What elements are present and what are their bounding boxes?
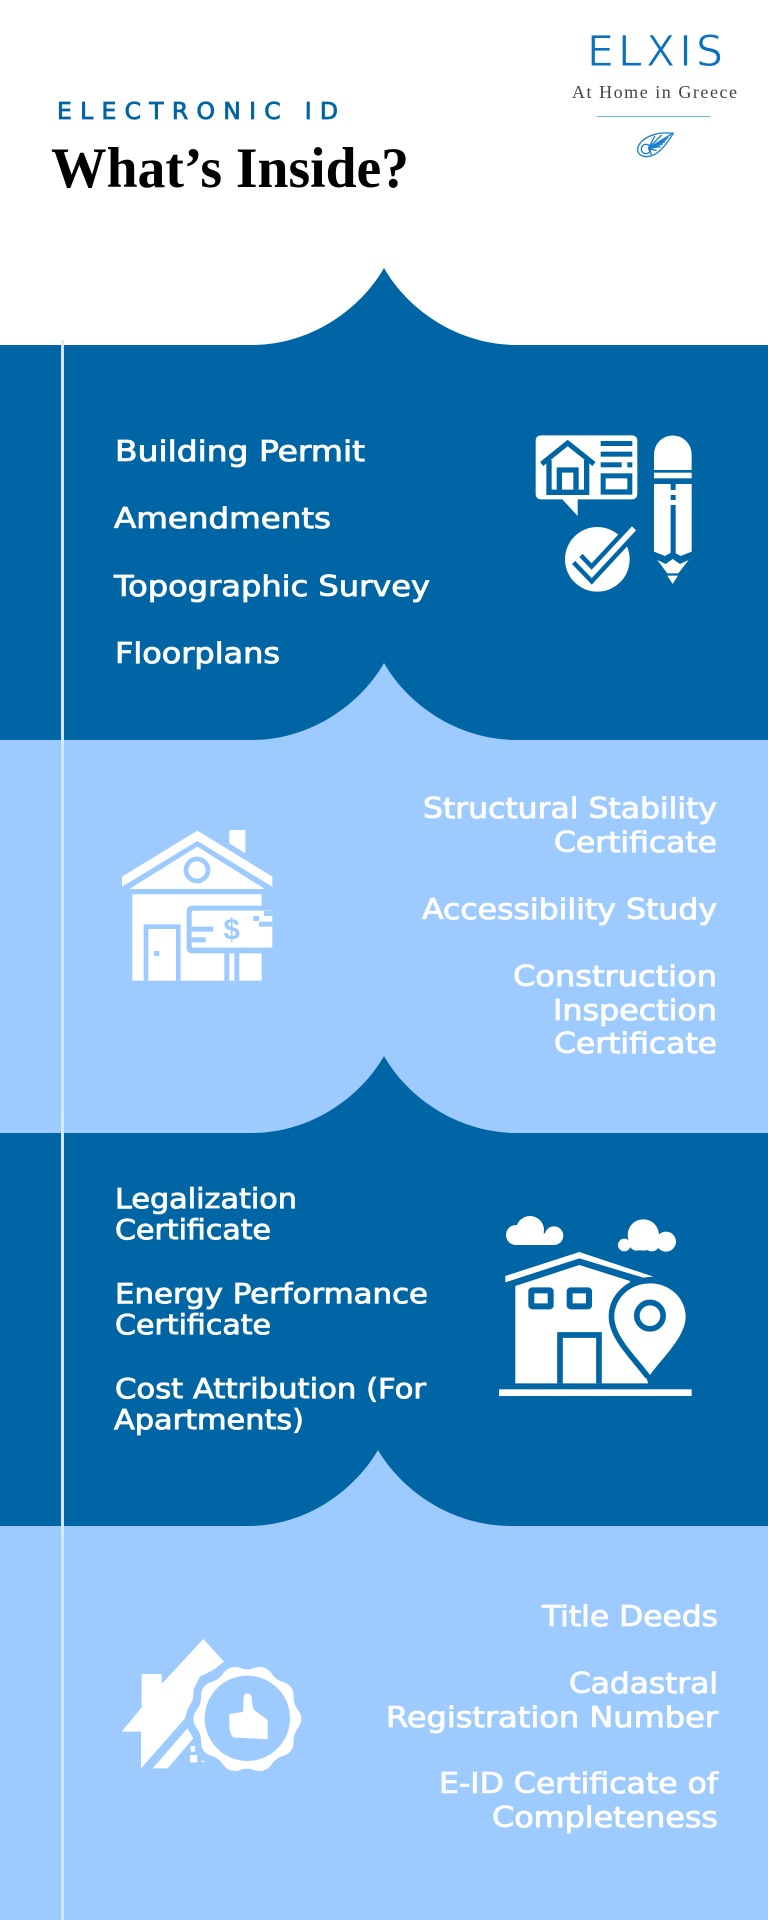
heading block (51, 97, 409, 200)
icon: house with price sign: $ (223, 913, 240, 946)
list: documents group 4: Title Deeds (541, 1600, 718, 1633)
list: documents group 2 (422, 792, 717, 1060)
panel: title deeds and completeness (0, 1450, 768, 1920)
list: documents group 2: Structural Stability (423, 792, 717, 825)
list: documents group 4 (386, 1600, 719, 1834)
list: documents group 3 (114, 1183, 428, 1436)
list: documents group 2: Construction (513, 960, 717, 993)
list: documents group 3: Energy Performance (115, 1278, 428, 1310)
list: documents group 1: Floorplans (115, 637, 280, 670)
icon: shell (638, 133, 673, 157)
list: documents group 1: Amendments (114, 502, 331, 535)
list: documents group 2: Certificate (554, 826, 717, 859)
logo wordmark: ELXIS (587, 28, 723, 77)
list: documents group 4: Registration Number (386, 1701, 718, 1734)
list: documents group 3: Apartments) (114, 1404, 304, 1436)
logo: Elxis (572, 28, 737, 157)
list: documents group 2: Certificate (554, 1027, 717, 1060)
panel: building permit documents (0, 268, 768, 740)
list: documents group 2: Accessibility Study (422, 893, 717, 926)
list: documents group 4: E-ID Certificate of (439, 1767, 719, 1800)
icon: house with price sign (122, 830, 272, 981)
title: What’s Inside? (51, 137, 409, 200)
icon: house plan, check mark and pencil (536, 435, 692, 592)
icon: house with thumbs-up badge (122, 1639, 301, 1771)
panel: structural certificates (0, 663, 768, 1133)
icon: house with location pin and clouds (499, 1216, 692, 1396)
list: documents group 1: Topographic Survey (113, 570, 430, 603)
panel: legalization and energy certificates (0, 1056, 768, 1526)
list: documents group 3: Certificate (115, 1214, 271, 1246)
list: documents group 1: Building Permit (115, 435, 365, 468)
list: documents group 3: Certificate (115, 1309, 271, 1341)
list: documents group 3: Legalization (115, 1183, 297, 1215)
list: documents group 4: Completeness (492, 1801, 718, 1834)
logo tagline: At Home in Greece (572, 82, 737, 102)
list: documents group 4: Cadastral (569, 1667, 718, 1700)
list: documents group 3: Cost Attribution (For (115, 1373, 427, 1405)
list: documents group 2: Inspection (553, 994, 717, 1027)
list: documents group 1 (113, 435, 430, 670)
eyebrow: Electronic ID: ELECTRONIC ID (57, 97, 338, 125)
